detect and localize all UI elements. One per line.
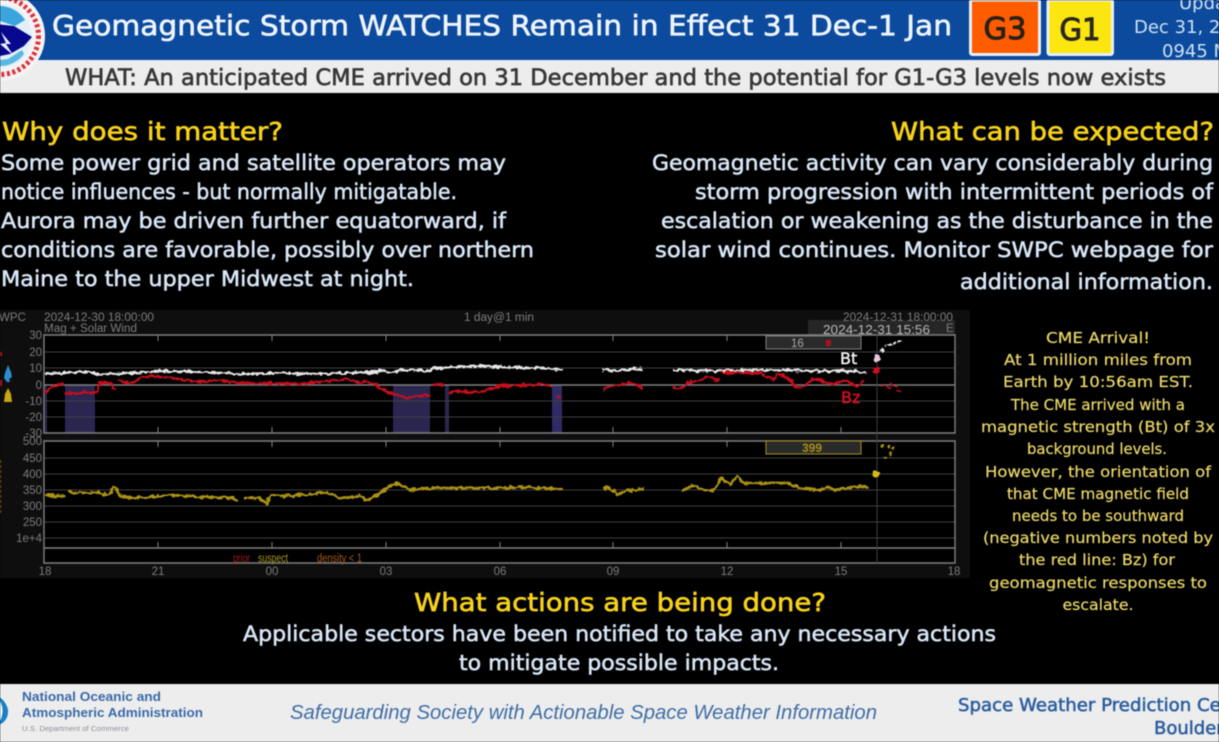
- y axis labels: [16, 330, 43, 545]
- callout: CME arrival: needs to be southward: [1012, 507, 1184, 525]
- y axis labels: 0: [36, 380, 42, 392]
- body text: expected: storm progression with intermittent periods of: [695, 180, 1214, 204]
- chart header labels: 2024-12-30 18:00:00: [44, 312, 154, 324]
- chart header labels: [0, 312, 954, 337]
- body text: why: [1, 151, 534, 291]
- left side markers: [0, 352, 12, 515]
- y axis labels: 30: [29, 330, 42, 342]
- summary strip: [0, 60, 1219, 93]
- badge: G3: G3: [984, 12, 1026, 47]
- x axis labels: 18: [39, 566, 51, 578]
- readout: speed: 399: [802, 441, 822, 455]
- header band: [0, 0, 1219, 62]
- chart header labels: 2024-12-31 18:00:00: [843, 312, 953, 324]
- body text: expected: Geomagnetic activity can vary considerably during: [652, 151, 1213, 175]
- y axis labels: 350: [23, 485, 42, 497]
- x axis labels: 18: [948, 566, 960, 578]
- y axis labels: -20: [25, 412, 42, 424]
- y axis labels: -10: [25, 396, 42, 408]
- y axis labels: 300: [23, 501, 42, 513]
- NOAA name: National Oceanic and: [22, 689, 161, 704]
- body text: expected: solar wind continues. Monitor SWPC webpage for: [655, 238, 1213, 262]
- panel: what actions are being done: [243, 588, 996, 675]
- y axis labels: 400: [23, 469, 42, 481]
- y axis labels: -30: [25, 428, 42, 440]
- callout: CME arrival: escalate.: [1062, 596, 1134, 614]
- heading: why does it matter: Why does it matter?: [2, 117, 283, 146]
- callout: CME arrival: that CME magnetic field: [1007, 485, 1189, 503]
- body text: why: Some power grid and satellite operators may: [1, 151, 506, 175]
- x axis labels: [39, 566, 960, 578]
- body text: expected: additional information.: [960, 270, 1213, 294]
- icon: NOAA logo: [0, 694, 8, 728]
- x axis labels: 12: [721, 566, 733, 578]
- callout: CME arrival: magnetic strength (Bt) of 3x: [981, 418, 1215, 436]
- y axis labels: 500: [23, 436, 42, 448]
- line: Bt: [45, 341, 901, 374]
- callout: CME arrival: The CME arrived with a: [1010, 396, 1185, 414]
- x axis labels: 03: [380, 566, 392, 578]
- y axis labels: 250: [23, 517, 42, 529]
- body text: expected: [652, 151, 1214, 294]
- y axis labels: 1e+4: [16, 533, 43, 545]
- body text: actions: [243, 622, 996, 675]
- chart: magnetometer and solar wind: [0, 310, 970, 578]
- callout: CME arrival: [981, 329, 1215, 614]
- panel: what can be expected: [652, 117, 1214, 294]
- chart header labels: E: [946, 323, 954, 335]
- icon: NWS logo: [0, 0, 45, 81]
- line: Bz: [45, 368, 899, 398]
- data quality legend: prior: [233, 553, 250, 565]
- NOAA name: U.S. Department of Commerce: [22, 726, 129, 733]
- x axis labels: 00: [266, 566, 278, 578]
- callout: CME arrival: CME Arrival!: [1046, 329, 1150, 347]
- x axis labels: 15: [835, 566, 847, 578]
- readout: Bt and Bz: [766, 336, 861, 350]
- SWPC name: [958, 695, 1219, 739]
- body text: actions: to mitigate possible impacts.: [459, 651, 779, 675]
- data quality legend: [233, 553, 362, 565]
- NOAA name: [22, 689, 203, 733]
- panel: why does it matter: [1, 117, 534, 291]
- shaded southward Bz periods: [45, 385, 562, 433]
- line: solar wind speed: [45, 446, 893, 505]
- x axis labels: 09: [607, 566, 619, 578]
- readout: Bt and Bz: 16: [791, 338, 804, 350]
- x axis labels: 06: [494, 566, 506, 578]
- body text: why: Maine to the upper Midwest at night.: [1, 267, 414, 291]
- y axis labels: 20: [29, 347, 42, 359]
- y axis labels: 450: [23, 453, 42, 465]
- footer band: [0, 684, 1219, 742]
- badge: G1: [1048, 0, 1112, 54]
- body text: why: notice influences - but normally mitigatable.: [1, 180, 457, 204]
- badge: G3: [970, 0, 1040, 54]
- body text: why: Aurora may be driven further equatorward, if: [1, 209, 507, 233]
- chart header labels: 2024-12-31 15:56: [823, 322, 930, 337]
- tagline: Safeguarding Society with Actionable Space Weather Information: [290, 702, 877, 724]
- callout: CME arrival: (negative numbers noted by: [983, 529, 1213, 547]
- NOAA name: Atmospheric Administration: [22, 705, 203, 720]
- heading: what can be expected: What can be expected?: [891, 117, 1214, 146]
- heading: actions: What actions are being done?: [414, 588, 826, 617]
- time ticks: [158, 335, 841, 548]
- body text: expected: escalation or weakening as the disturbance in the: [661, 209, 1213, 233]
- badge: G1: G1: [1060, 13, 1100, 48]
- label: Bt: Bt: [840, 349, 857, 368]
- callout: CME arrival: background levels.: [1027, 440, 1167, 458]
- callout: CME arrival: geomagnetic responses to: [989, 574, 1207, 592]
- data quality legend: suspect: [258, 553, 289, 565]
- updated date: [1134, 0, 1219, 62]
- chart header labels: 1 day@1 min: [464, 312, 534, 324]
- title: Geomagnetic Storm WATCHES Remain in Effect 31 Dec-1 Jan: [52, 9, 952, 42]
- readout: speed: [766, 441, 861, 455]
- summary strip: WHAT: An anticipated CME arrived on 31 December and the potential for G1-G3 levels now exists: [65, 66, 1166, 91]
- y axis labels: 10: [29, 363, 42, 375]
- body text: why: conditions are favorable, possibly over northern: [1, 238, 534, 262]
- label: Bz: Bz: [841, 388, 860, 407]
- callout: CME arrival: the red line: Bz) for: [1019, 551, 1176, 569]
- data quality legend: density < 1: [317, 553, 362, 565]
- callout: CME arrival: Earth by 10:56am EST.: [1003, 373, 1193, 391]
- callout: CME arrival: However, the orientation of: [985, 463, 1212, 481]
- callout: CME arrival: At 1 million miles from: [1004, 351, 1192, 369]
- chart header labels: Mag + Solar Wind: [44, 323, 137, 335]
- body text: actions: Applicable sectors have been notified to take any necessary actions: [243, 622, 996, 646]
- x axis labels: 21: [152, 566, 164, 578]
